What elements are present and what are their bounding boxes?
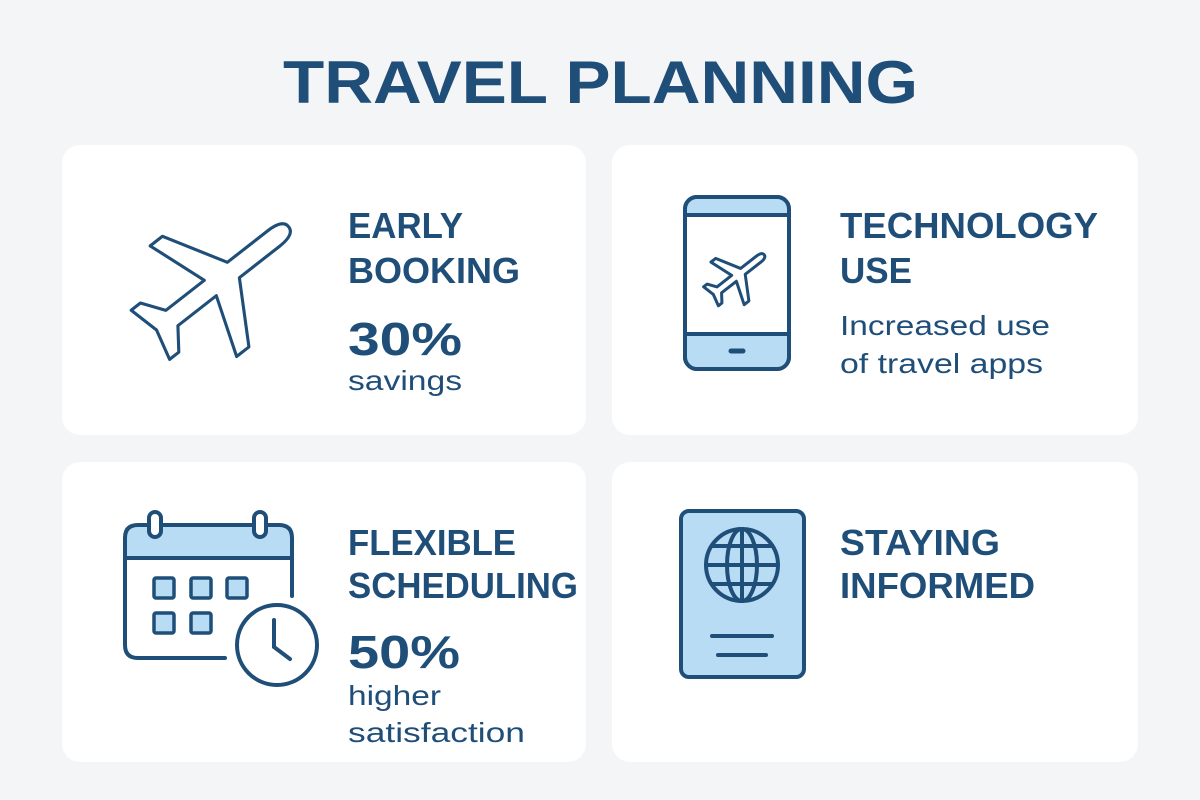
- icon: airplane: [107, 171, 332, 390]
- title: TRAVEL PLANNING: [283, 49, 918, 116]
- heading: technology use: [840, 205, 1098, 291]
- panel: flexible scheduling: [62, 462, 586, 762]
- heading: staying informed: STAYING: [840, 522, 1000, 563]
- icon: passport: [681, 511, 804, 677]
- heading: early booking: BOOKING: [348, 250, 520, 291]
- stat: 50% higher satisfaction: [348, 626, 525, 748]
- text: increased use of travel apps: [840, 310, 1050, 379]
- heading: flexible scheduling: SCHEDULING: [348, 565, 578, 606]
- panel: staying informed: [612, 462, 1138, 762]
- heading: technology use: USE: [840, 250, 912, 291]
- stat: 30% savings: 30%: [348, 313, 462, 365]
- heading: technology use: TECHNOLOGY: [840, 205, 1098, 246]
- heading: flexible scheduling: FLEXIBLE: [348, 522, 516, 563]
- panel: technology use: [612, 145, 1138, 435]
- stat: 50% higher satisfaction: satisfaction: [348, 717, 525, 748]
- text: increased use of travel apps: of travel apps: [840, 348, 1043, 379]
- heading: staying informed: [840, 522, 1035, 606]
- stat: 50% higher satisfaction: 50%: [348, 626, 460, 678]
- heading: flexible scheduling: [348, 522, 578, 606]
- text: increased use of travel apps: Increased use: [840, 310, 1050, 341]
- heading: staying informed: INFORMED: [840, 565, 1035, 606]
- icon: phone with plane: [685, 197, 789, 369]
- heading: early booking: EARLY: [348, 205, 463, 246]
- stat: 30% savings: savings: [348, 365, 462, 396]
- panel: early booking: [62, 145, 586, 435]
- icon: calendar with clock: [125, 512, 317, 685]
- stat: 30% savings: [348, 313, 462, 396]
- stat: 50% higher satisfaction: higher: [348, 680, 441, 711]
- heading: early booking: [348, 205, 520, 291]
